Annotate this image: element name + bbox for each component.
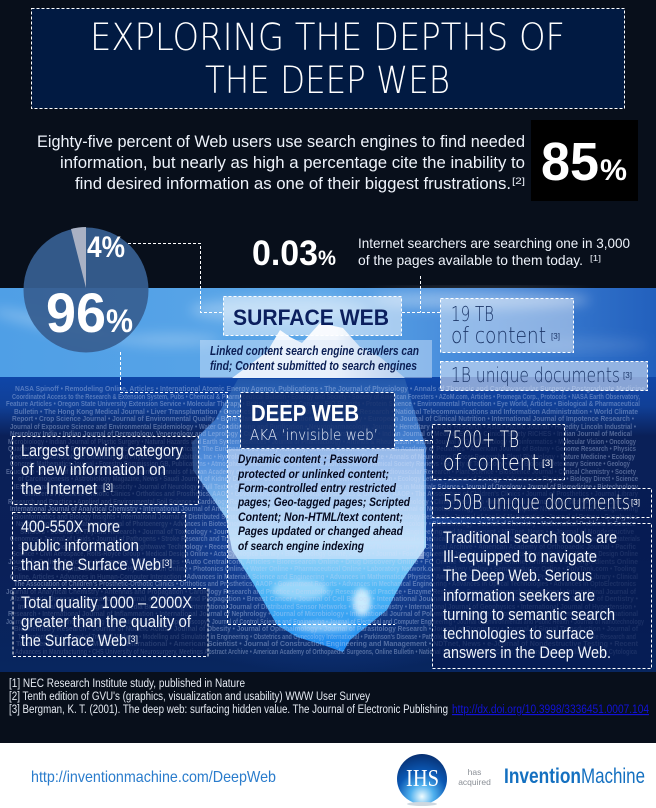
footer url: http://inventionmachine.com/DeepWeb bbox=[31, 769, 276, 786]
callout: largest growing category: Largest growing category bbox=[21, 441, 183, 460]
title: EXPLORING THE DEPTHS OF bbox=[90, 16, 565, 59]
references bbox=[9, 678, 650, 716]
surface stat: 19 TB bbox=[440, 298, 574, 352]
deep stat: 7500+ TB: 7500+ TB bbox=[443, 428, 519, 453]
callout: largest growing category: of new information on bbox=[21, 460, 166, 479]
intro text: Eighty-five percent of Web users use search engines to find needed bbox=[37, 133, 525, 151]
pie chart: 96 percent and 4 percent: 96 bbox=[46, 281, 106, 344]
has acquired label bbox=[458, 767, 491, 787]
background journal text bbox=[6, 384, 645, 656]
deep web description: Content; Non-HTML/text content; bbox=[238, 510, 403, 524]
deep web description: protected or unlinked content; bbox=[237, 467, 389, 481]
deep stat: 7500+ TB: of content bbox=[443, 451, 539, 476]
deep web description bbox=[228, 449, 424, 559]
surface stat: 19 TB: 19 TB bbox=[451, 302, 494, 326]
title bbox=[32, 8, 624, 108]
pie chart: 96 percent and 4 percent bbox=[24, 227, 148, 352]
searchers text bbox=[358, 235, 630, 268]
background journal text: Treatment • Veterinary Medicine International • American Scientist • Journal of Construction Engineering and Management • NDTnet, News • e-Journal of Nondestructive Testing • Recent bbox=[16, 639, 639, 648]
intro text: information, but nearly as high a percentage cite the inability to bbox=[60, 154, 525, 172]
logo: IHS bbox=[397, 754, 447, 806]
surface web description: find; Content submitted to search engines bbox=[210, 359, 417, 373]
surface web description bbox=[200, 340, 432, 378]
callout: 400-550X more bbox=[12, 512, 186, 580]
callout: traditional search tools bbox=[432, 524, 652, 668]
stat: 85 percent: 85 bbox=[541, 132, 599, 192]
background journal text: Journals Online, Articles • Aerospace Online, Articles • Auto Central.com, Articles • Bioresearch Online • Drug Discovery Online • FC Online • Fiber Optics Online, Articles • Food Ingredients Online bbox=[8, 557, 638, 566]
references: [2] Tenth edition of GVU's (graphics, visualization and usability) WWW User Survey bbox=[9, 691, 370, 703]
searchers text: Internet searchers are searching one in 3,000 bbox=[358, 235, 630, 251]
intro text: [2] bbox=[512, 176, 525, 187]
callout: traditional search tools: turning to semantic search bbox=[443, 605, 615, 624]
searchers text: of the pages available to them today. bbox=[358, 252, 583, 268]
iceberg under water bbox=[192, 379, 426, 652]
callout: largest growing category bbox=[12, 436, 198, 504]
callout: total quality: Total quality 1000 – 2000X bbox=[21, 593, 192, 612]
has acquired label: acquired bbox=[458, 777, 491, 787]
logo: Invention Machine: Invention bbox=[504, 765, 581, 788]
surface web heading: SURFACE WEB bbox=[233, 305, 389, 330]
logo: Invention Machine bbox=[504, 765, 645, 788]
callout: traditional search tools: Traditional search tools are bbox=[443, 528, 617, 547]
searchers text: [1] bbox=[590, 254, 601, 263]
has acquired label: has bbox=[468, 767, 481, 777]
surface web description: Linked content search engine crawlers can bbox=[210, 344, 419, 358]
stat: 0.03 percent: 0.03 bbox=[252, 234, 318, 273]
intro text: find desired information as one of their biggest frustrations. bbox=[75, 175, 511, 193]
title: THE DEEP WEB bbox=[205, 59, 450, 102]
deep stat: 7500+ TB: [3] bbox=[542, 458, 553, 468]
callout: traditional search tools: answers in the Deep Web. bbox=[443, 643, 611, 662]
surface web heading bbox=[224, 296, 402, 336]
callout: traditional search tools: information seekers are bbox=[443, 586, 595, 605]
callout: 400-550X more: 400-550X more bbox=[21, 517, 120, 536]
logo: IHS: IHS bbox=[406, 766, 439, 792]
callout: traditional search tools: Ill-equipped to navigate bbox=[443, 547, 597, 566]
callout: 400-550X more: [3] bbox=[162, 558, 172, 568]
deep web description: of search engine indexing bbox=[238, 539, 365, 553]
references: [3] Bergman, K. T. (2001). The deep web: surfacing hidden value. The Journal of Electronic Publishing bbox=[9, 704, 448, 716]
iceberg above water bbox=[232, 323, 405, 378]
deep web heading: DEEP WEB bbox=[251, 400, 359, 426]
deep web description: Pages updated or changed ahead bbox=[238, 524, 404, 538]
connector lines bbox=[120, 244, 440, 624]
callout: total quality bbox=[13, 588, 208, 656]
deep stat: 550B documents: [3] bbox=[631, 497, 640, 507]
callout: largest growing category: [3] bbox=[103, 482, 113, 492]
pie chart: 96 percent and 4 percent: 4% bbox=[87, 231, 125, 264]
callout: 400-550X more: public information bbox=[21, 536, 139, 555]
deep web heading: AKA ‘invisible web’ bbox=[250, 426, 378, 444]
surface stat: 19 TB: [3] bbox=[551, 331, 560, 341]
intro text bbox=[37, 133, 525, 193]
surface stat: 19 TB: of content bbox=[451, 324, 546, 349]
sky with clouds bbox=[0, 288, 656, 378]
callout: total quality: greater than the quality of bbox=[21, 612, 191, 631]
surface stat: 1B documents: [3] bbox=[623, 370, 632, 380]
stat: 0.03 percent: % bbox=[318, 247, 336, 270]
stat: 85 percent: % bbox=[600, 154, 627, 187]
deep web description: Form-controlled entry restricted bbox=[238, 481, 397, 495]
pie chart: 96 percent and 4 percent: % bbox=[106, 303, 133, 339]
callout: largest growing category: the Internet bbox=[21, 479, 97, 498]
callout: traditional search tools: technologies to surface bbox=[443, 624, 594, 643]
footer band bbox=[0, 743, 656, 808]
deep web heading bbox=[240, 392, 394, 448]
references: [1] NEC Research Institute study, published in Nature bbox=[9, 678, 245, 690]
deep stat: 7500+ TB bbox=[432, 424, 564, 480]
callout: traditional search tools: The Deep Web. Serious bbox=[443, 566, 592, 585]
callout: total quality: [3] bbox=[128, 634, 138, 644]
sea bbox=[0, 377, 656, 675]
stat: 85 percent bbox=[531, 120, 638, 201]
callout: total quality: the Surface Web bbox=[21, 631, 127, 650]
deep web description: pages; Geo-tagged pages; Scripted bbox=[237, 495, 411, 509]
deep web description: Dynamic content ; Password bbox=[238, 452, 379, 466]
callout: 400-550X more: than the Surface Web bbox=[21, 555, 161, 574]
